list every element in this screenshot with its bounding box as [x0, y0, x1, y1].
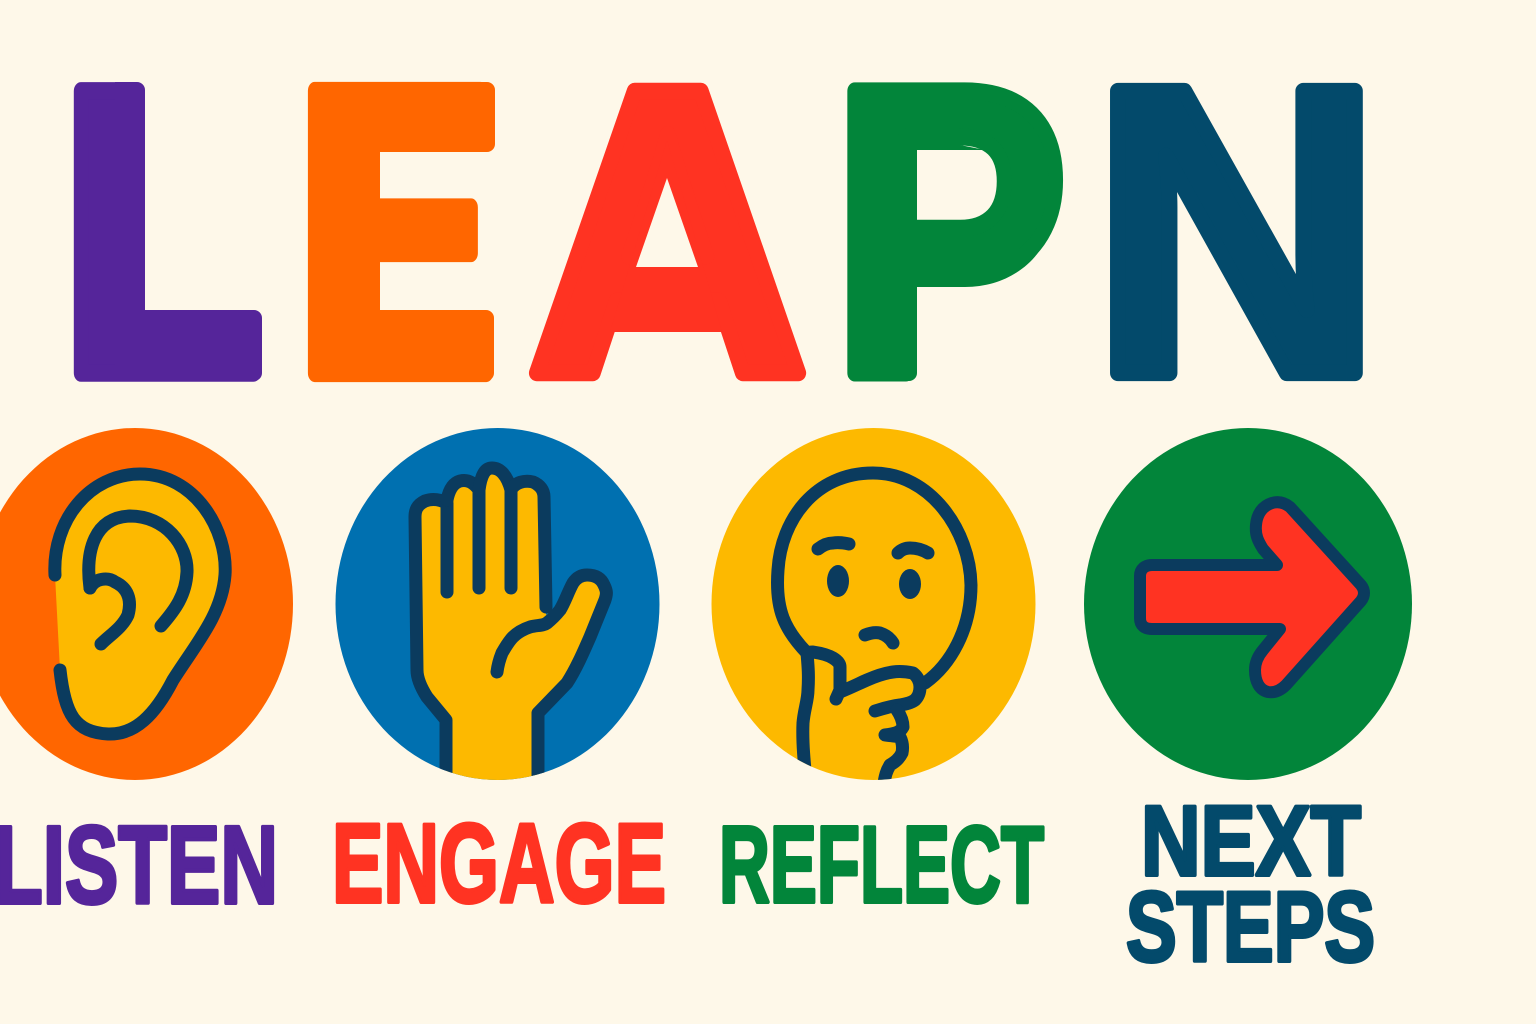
label: REFLECT: REFLECT — [719, 804, 1044, 926]
label: NEXT STEPS: STEPS — [1126, 871, 1375, 982]
infographic canvas — [0, 82, 1412, 964]
icon: thinking face on yellow circle — [712, 428, 1036, 790]
letter P: P — [831, 3, 1068, 461]
label: NEXT STEPS: NEXT — [1141, 785, 1361, 896]
icon: red arrow on green circle — [1084, 428, 1412, 780]
label: NEXT STEPS — [1126, 785, 1375, 982]
icon: raised hand on blue circle — [336, 428, 660, 790]
letter E: E — [294, 2, 498, 460]
icon: ear on orange circle — [0, 428, 293, 780]
title: LEAPN — [58, 2, 1382, 461]
letter N: N — [1091, 3, 1382, 461]
label: LISTEN: LISTEN — [0, 804, 278, 927]
letter L: L — [58, 3, 264, 461]
label: ENGAGE: ENGAGE — [332, 801, 666, 926]
letter A: A — [527, 2, 809, 460]
